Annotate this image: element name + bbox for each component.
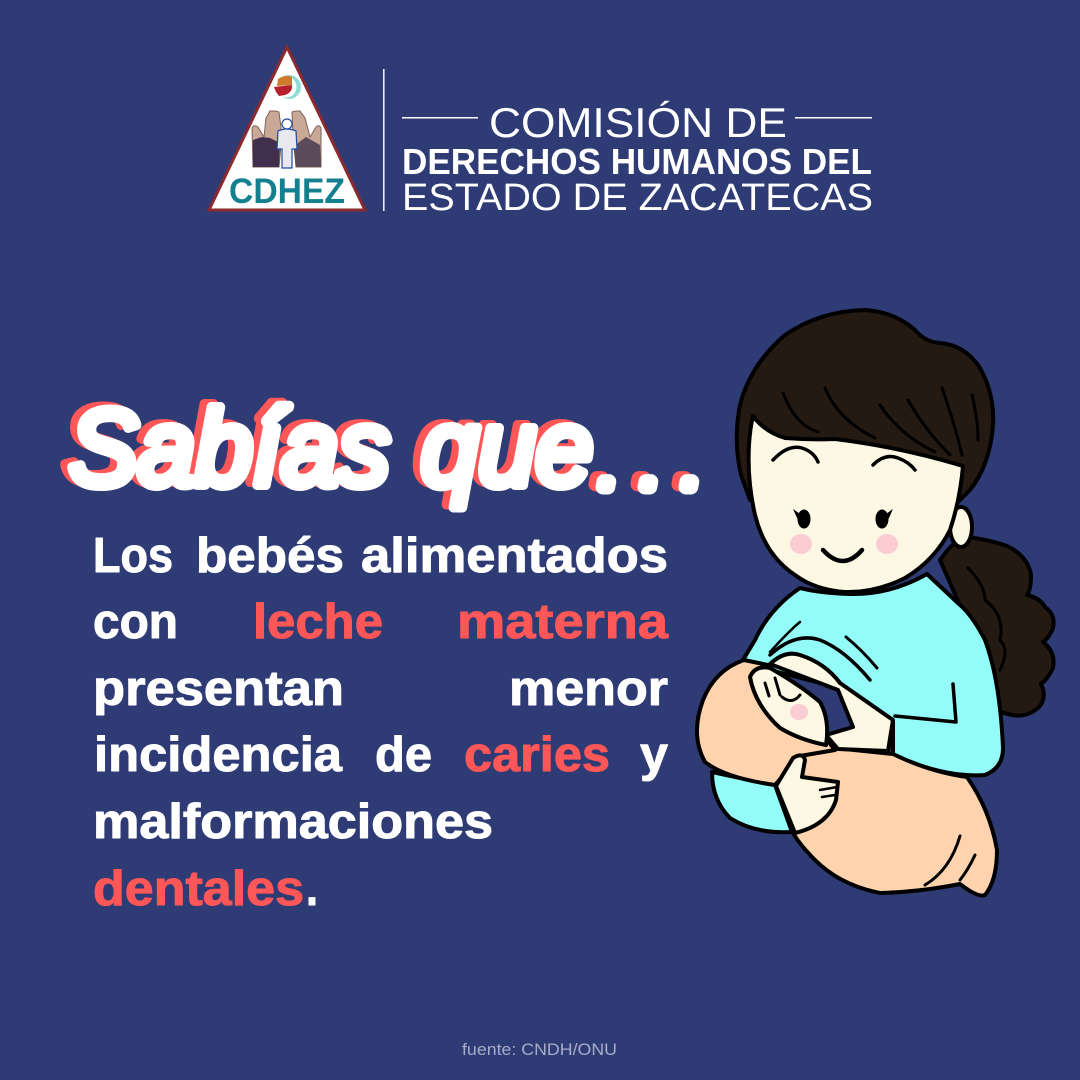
baby blanket [793,748,997,896]
cheeks [790,534,898,554]
divider line [383,69,385,211]
body text: Los [93,529,173,583]
baby body [697,660,835,785]
hair [737,310,993,505]
body text: . [306,862,318,916]
body text: menor [509,662,668,716]
title face: . [601,442,615,498]
body text: de [375,728,432,782]
header: organisation name: COMISIÓN DE [489,99,787,146]
illustration: mother breastfeeding baby [697,310,1054,896]
mother upper hand [770,654,893,751]
title face: . [643,442,657,498]
mother lower hand [776,755,838,833]
body text: bebés [196,529,344,583]
baby head [750,667,827,745]
title shadow: Sabías [62,384,383,505]
body text: presentan [93,662,344,716]
baby face details [765,678,800,701]
title shadow: . [677,439,691,495]
title: Sabías que... [62,384,698,508]
lower sleeve [712,772,792,832]
eyes [793,509,893,528]
logo: CDHEZ triangle emblem [209,47,365,211]
icon: human figure [277,119,297,168]
body text [93,529,669,916]
ponytail strands [968,568,1005,670]
baby cheek [790,704,808,720]
body text: incidencia [94,728,343,782]
icon: sheltering hands [252,111,321,167]
body text: malformaciones [93,795,493,849]
title shadow: que [414,384,586,505]
ponytail [940,537,1054,716]
title face: que [421,387,593,508]
title face: Sabías [69,387,390,508]
logo lettering: CDHEZ [229,172,345,211]
body text: leche [253,595,383,649]
eyebrows [773,447,915,470]
header: organisation name: ESTADO DE ZACATECAS [402,177,873,219]
title face [69,387,698,508]
body text: con [93,595,178,649]
body text: y [640,728,668,782]
header: organisation name: DERECHOS HUMANOS DEL [402,141,872,182]
body text: caries [464,728,610,782]
body text: dentales [93,862,304,916]
hand and clothing folds [770,622,975,885]
title face: . [684,442,698,498]
torso shirt [743,574,1003,775]
face [749,416,963,592]
title shadow: . [594,439,608,495]
smile [823,550,862,561]
source note: fuente: CNDH/ONU [462,1040,617,1059]
body text: materna [457,595,669,649]
header: organisation name [402,99,873,219]
icon: sun and moon [274,75,301,99]
ear [950,507,972,547]
title shadow [62,384,691,505]
title shadow: . [636,439,650,495]
hair strands [783,388,978,455]
body text: alimentados [361,529,668,583]
